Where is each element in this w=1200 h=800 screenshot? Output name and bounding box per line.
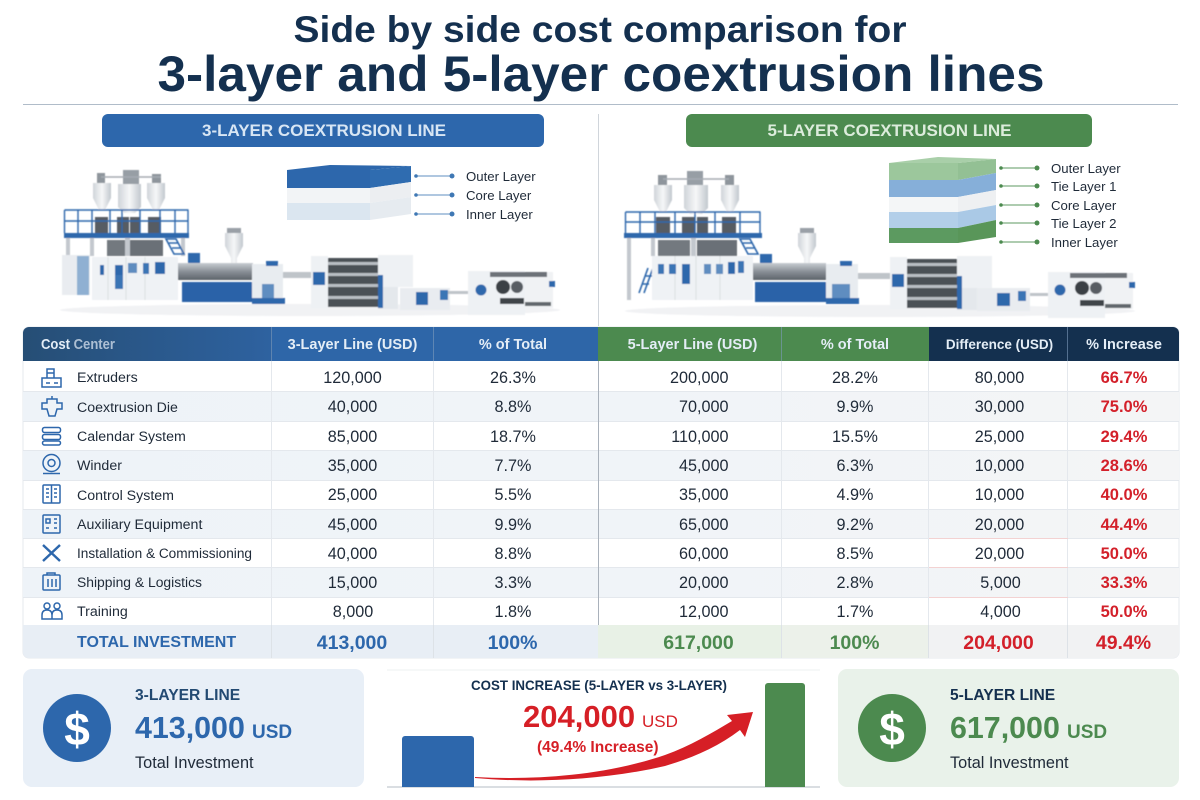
legend: 5-layer labels: Tie Layer 1 — [1051, 179, 1116, 194]
illustration: 5-layer production line — [624, 171, 1135, 318]
banner: 5-layer line: 5-LAYER COEXTRUSION LINE — [767, 121, 1012, 140]
row: Control System: 4.9% — [837, 486, 873, 504]
title: 3-layer and 5-layer coextrusion lines — [158, 46, 1044, 102]
summary card: 3-layer: USD — [252, 722, 292, 743]
row: Control System: 40.0% — [1101, 486, 1148, 504]
row: Auxiliary Equipment: 9.9% — [495, 516, 531, 534]
row: Total Investment: 413,000 — [317, 632, 387, 654]
summary card: 5-layer: Total Investment — [950, 754, 1069, 772]
diagram: 5-layer structure — [889, 157, 996, 243]
row: Shipping & Logistics: 20,000 — [679, 574, 728, 592]
row: Calendar System: 29.4% — [1101, 428, 1148, 446]
row: Winder: 28.6% — [1101, 457, 1148, 475]
bar: 3-layer — [402, 736, 474, 787]
row: Auxiliary Equipment: 65,000 — [679, 516, 728, 534]
legend: 5-layer labels: Outer Layer — [1051, 161, 1121, 176]
row: Auxiliary Equipment: 20,000 — [975, 516, 1024, 534]
row: Extruders: 120,000 — [323, 369, 382, 387]
table header row: Cost Center — [41, 337, 115, 353]
row: Shipping & Logistics: 15,000 — [328, 574, 377, 592]
alternating row shading — [23, 391, 1179, 597]
row: Shipping & Logistics: 2.8% — [837, 574, 873, 592]
row: Winder: 45,000 — [679, 457, 728, 475]
row: Winder: Winder — [77, 458, 122, 474]
legend: 3-layer labels: Inner Layer — [466, 207, 533, 222]
row: Calendar System: 15.5% — [832, 428, 878, 446]
summary card: 3-layer: 3-LAYER LINE — [135, 687, 240, 704]
row: Calendar System — [42, 428, 1148, 446]
row: Control System: 5.5% — [495, 486, 531, 504]
row: Installation & Commissioning: 50.0% — [1101, 545, 1148, 563]
row: Winder: 6.3% — [837, 457, 873, 475]
icon: dollar coin green — [858, 694, 926, 762]
cost table — [23, 327, 1179, 658]
summary card: 3-layer — [23, 669, 364, 787]
row: Shipping & Logistics: 5,000 — [980, 574, 1021, 592]
row: Training: 1.8% — [495, 603, 531, 621]
row: Training: 50.0% — [1101, 603, 1148, 621]
row: Control System: 10,000 — [975, 486, 1024, 504]
legend: 5-layer labels — [999, 161, 1121, 250]
row: Coextrusion Die: 40,000 — [328, 398, 377, 416]
row: Auxiliary Equipment — [43, 515, 1148, 534]
row: Control System: 35,000 — [679, 486, 728, 504]
legend: 5-layer labels: Core Layer — [1051, 198, 1117, 213]
icon: dollar coin blue — [43, 694, 111, 762]
row: Total Investment: 100% — [830, 632, 879, 654]
illustration: 3-layer production line — [60, 170, 560, 316]
row: Calendar System: 110,000 — [671, 428, 728, 446]
row: Coextrusion Die: 75.0% — [1101, 398, 1148, 416]
row: Winder — [43, 454, 1148, 475]
arrow: increase — [475, 712, 753, 780]
row: Auxiliary Equipment: Auxiliary Equipment — [77, 517, 202, 533]
row: Coextrusion Die: 30,000 — [975, 398, 1024, 416]
chart: cost increase — [387, 670, 820, 787]
row: Calendar System: 25,000 — [975, 428, 1024, 446]
row: Total Investment: 49.4% — [1096, 632, 1151, 654]
row: Installation & Commissioning: 40,000 — [328, 545, 377, 563]
legend: 3-layer labels: Outer Layer — [466, 169, 536, 184]
row: Control System: 25,000 — [328, 486, 377, 504]
row: Total Investment — [23, 625, 1179, 658]
row: Total Investment: 204,000 — [963, 632, 1034, 654]
table header row: % of Total — [479, 337, 547, 353]
legend: 3-layer labels: Core Layer — [466, 188, 532, 203]
table header row: % Increase — [1086, 337, 1162, 353]
row: Training: 12,000 — [679, 603, 728, 621]
row: Training — [42, 603, 1148, 621]
row: Shipping & Logistics — [43, 573, 1148, 592]
row: Training: Training — [77, 604, 128, 620]
legend: 3-layer labels — [414, 169, 536, 222]
row: Total Investment: 100% — [488, 632, 537, 654]
row: Coextrusion Die: 70,000 — [679, 398, 728, 416]
table header row — [23, 327, 1179, 361]
banner: 3-layer line: 3-LAYER COEXTRUSION LINE — [202, 121, 446, 140]
icon: dollar coin blue: $ — [64, 703, 90, 755]
row: Installation & Commissioning — [43, 545, 1148, 563]
row: Extruders: 200,000 — [670, 369, 728, 387]
row: Extruders: 66.7% — [1101, 369, 1148, 387]
row: Auxiliary Equipment: 45,000 — [328, 516, 377, 534]
table header row: 5-Layer Line (USD) — [628, 337, 758, 353]
row: Installation & Commissioning: Installation & Commissioning — [77, 546, 252, 562]
row: Total Investment: TOTAL INVESTMENT — [77, 634, 236, 651]
legend: 5-layer labels: Tie Layer 2 — [1051, 216, 1116, 231]
banner: 3-layer line — [102, 114, 544, 147]
summary card: 3-layer: 413,000 — [135, 711, 245, 745]
summary card: 5-layer — [838, 669, 1179, 787]
summary card: 5-layer: 5-LAYER LINE — [950, 687, 1055, 704]
table header row: % of Total — [821, 337, 889, 353]
row: Control System — [43, 485, 1148, 504]
row: Training: 1.7% — [837, 603, 873, 621]
row: Installation & Commissioning: 8.5% — [837, 545, 873, 563]
legend: 5-layer labels: Inner Layer — [1051, 235, 1118, 250]
row: Installation & Commissioning: 8.8% — [495, 545, 531, 563]
title: Side by side cost comparison for — [294, 9, 906, 50]
title — [158, 9, 1044, 102]
row: Coextrusion Die: 9.9% — [837, 398, 873, 416]
row: Training: 8,000 — [333, 603, 373, 621]
chart title: COST INCREASE (5-LAYER vs 3-LAYER) — [471, 677, 727, 693]
row: Extruders: 28.2% — [832, 369, 878, 387]
row: Calendar System: 18.7% — [490, 428, 536, 446]
table header row: Difference (USD) — [946, 337, 1053, 352]
icon: dollar coin green: $ — [879, 703, 905, 755]
summary card: 5-layer: 617,000 — [950, 711, 1060, 745]
row: Extruders: 26.3% — [490, 369, 536, 387]
summary card: 5-layer: USD — [1067, 722, 1107, 743]
row: Shipping & Logistics: 3.3% — [495, 574, 531, 592]
row: Winder: 7.7% — [495, 457, 531, 475]
summary card: 3-layer: Total Investment — [135, 754, 254, 772]
cost increase unit: USD — [642, 712, 678, 731]
banner: 5-layer line — [686, 114, 1092, 147]
bar: 5-layer — [765, 683, 805, 787]
row: Calendar System: 85,000 — [328, 428, 377, 446]
row: Winder: 10,000 — [975, 457, 1024, 475]
row: Installation & Commissioning: 60,000 — [679, 545, 728, 563]
diagram: 3-layer structure — [287, 165, 411, 220]
row: Shipping & Logistics: 33.3% — [1101, 574, 1148, 592]
row: Extruders: Extruders — [77, 370, 138, 386]
row: Coextrusion Die — [42, 396, 1148, 416]
row: Auxiliary Equipment: 44.4% — [1101, 516, 1148, 534]
row: Coextrusion Die: Coextrusion Die — [77, 400, 178, 416]
row: Control System: Control System — [77, 488, 174, 504]
row: Training: 4,000 — [980, 603, 1021, 621]
row: Extruders: 80,000 — [975, 369, 1024, 387]
row: Total Investment: 617,000 — [663, 632, 734, 654]
row: Extruders — [42, 369, 1148, 387]
table header row: 3-Layer Line (USD) — [288, 337, 418, 353]
row: Winder: 35,000 — [328, 457, 377, 475]
row: Auxiliary Equipment: 9.2% — [837, 516, 873, 534]
row: Shipping & Logistics: Shipping & Logistics — [77, 575, 202, 591]
row: Installation & Commissioning: 20,000 — [975, 545, 1024, 563]
row: Calendar System: Calendar System — [77, 429, 186, 445]
increase percentage: (49.4% Increase) — [537, 739, 658, 756]
row: Coextrusion Die: 8.8% — [495, 398, 531, 416]
cost increase figure: 204,000 — [523, 699, 635, 734]
